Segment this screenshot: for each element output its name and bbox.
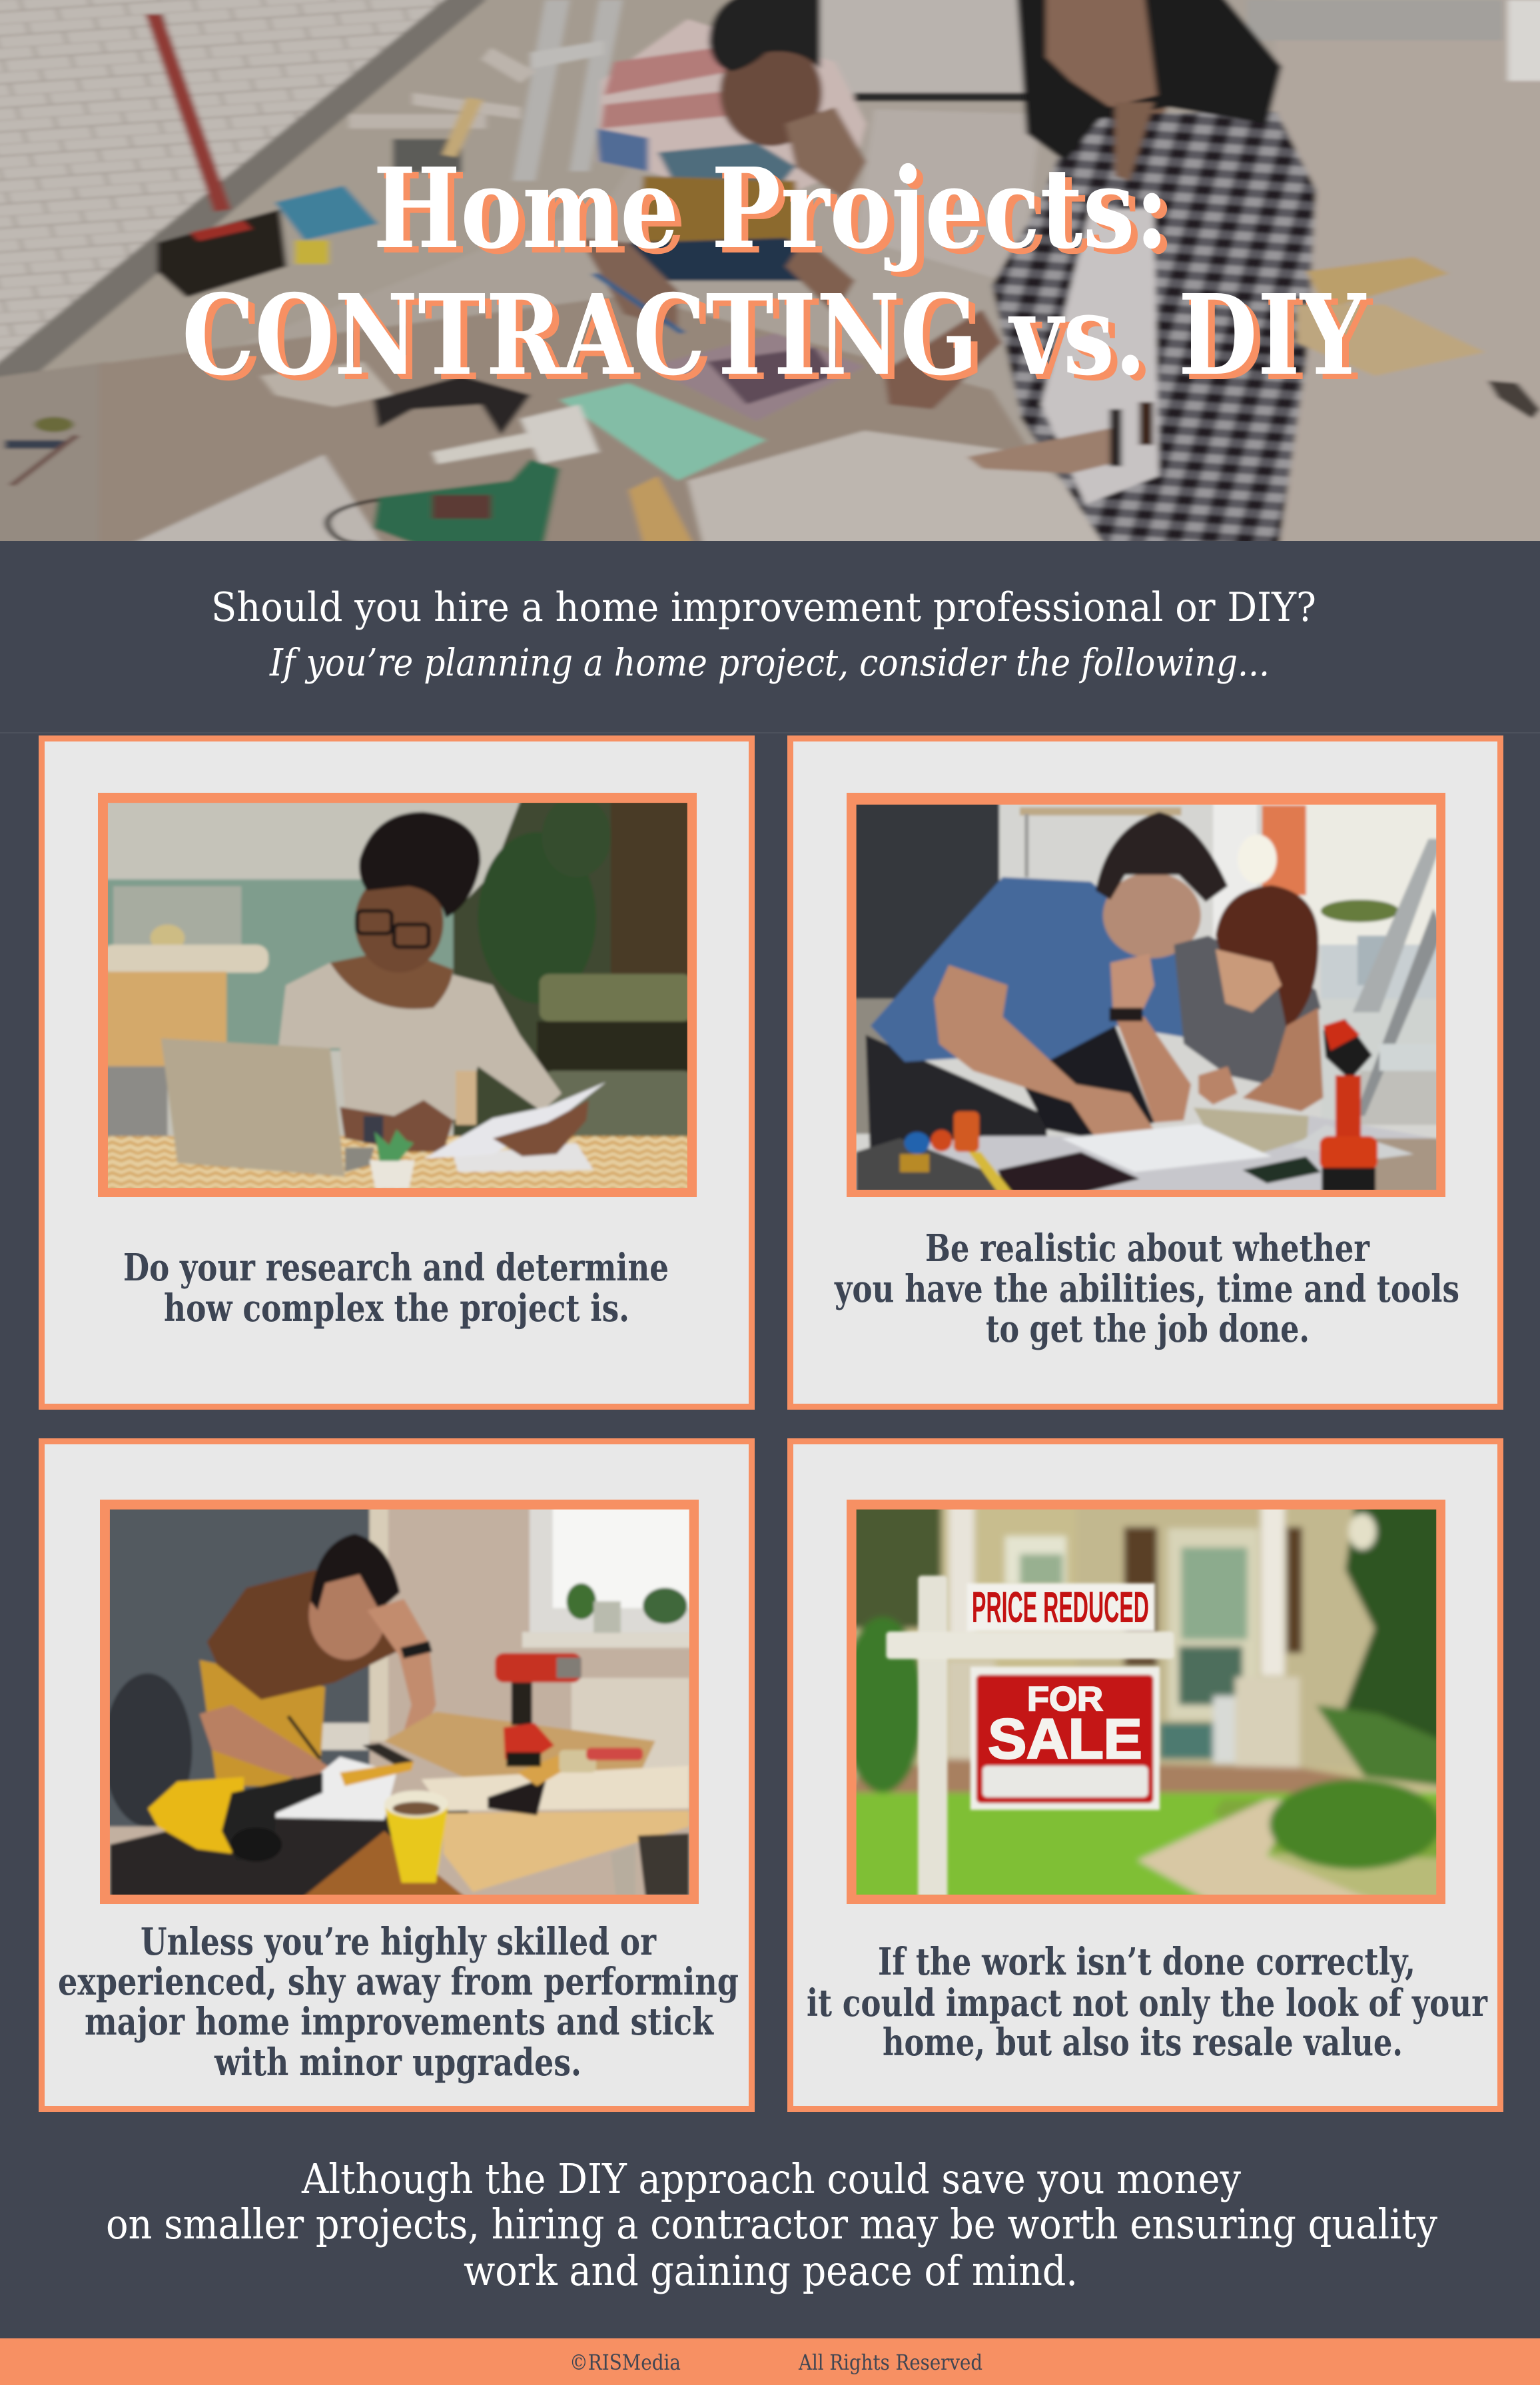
red drill bbox=[1324, 1019, 1372, 1080]
caption: with minor upgrades. bbox=[214, 2041, 581, 2085]
panel: be realistic bbox=[790, 738, 1500, 1407]
panel: do your research bbox=[41, 738, 751, 1407]
man bbox=[865, 1034, 1048, 1150]
photo: woman researching on laptop bbox=[99, 796, 699, 1197]
footer bar bbox=[0, 2338, 1540, 2385]
subtitle question: Should you hire a home improvement professional or DIY? bbox=[211, 584, 1316, 631]
caption bbox=[807, 1940, 1488, 2065]
yellow drill bbox=[148, 1777, 244, 1853]
panel: shy away from major improvements bbox=[41, 1442, 751, 2109]
subtitle italic lead-in: If you’re planning a home project, consider the following... bbox=[269, 642, 1270, 685]
table bbox=[384, 1711, 655, 1781]
copyright: ©RISMedia bbox=[570, 2350, 681, 2375]
photo frame bbox=[100, 1500, 699, 1904]
caption: Do your research and determine bbox=[123, 1246, 669, 1290]
photo frame bbox=[847, 793, 1445, 1197]
closing statement bbox=[106, 2154, 1437, 2295]
drill bbox=[370, 458, 562, 541]
caption bbox=[834, 1226, 1459, 1351]
closing statement: work and gaining peace of mind. bbox=[464, 2246, 1078, 2295]
caption: Be realistic about whether bbox=[925, 1226, 1370, 1270]
panel: resale value bbox=[790, 1442, 1500, 2109]
photo: couple reviewing plans bbox=[846, 796, 1448, 1197]
title bbox=[182, 144, 1367, 400]
woman bbox=[1147, 105, 1170, 116]
photo: man measuring at a workbench bbox=[99, 1502, 699, 1903]
caption: major home improvements and stick bbox=[85, 2000, 714, 2044]
caption: If the work isn’t done correctly, bbox=[878, 1940, 1415, 1984]
closing statement: Although the DIY approach could save you money bbox=[301, 2154, 1241, 2203]
caption: how complex the project is. bbox=[164, 1286, 629, 1330]
caption bbox=[58, 1920, 739, 2085]
caption: home, but also its resale value. bbox=[883, 2021, 1403, 2065]
woman bbox=[1174, 936, 1321, 1085]
boards bbox=[1306, 257, 1449, 309]
table bbox=[97, 297, 1027, 541]
caption: Unless you’re highly skilled or bbox=[141, 1920, 657, 1964]
photo frame bbox=[847, 1500, 1445, 1904]
sign text: SALE bbox=[988, 1707, 1142, 1770]
caption bbox=[123, 1246, 669, 1330]
ladder bbox=[513, 0, 570, 181]
sign text bbox=[972, 1582, 1149, 1770]
caption: to get the job done. bbox=[986, 1307, 1310, 1351]
caption: experienced, shy away from performing bbox=[58, 1960, 739, 2004]
sign text: FOR bbox=[1027, 1679, 1103, 1718]
desk bbox=[846, 1116, 1443, 1197]
photo: for sale sign in front of a house: PRICE REDUCED bbox=[972, 1582, 1149, 1632]
title: Home Projects: bbox=[373, 144, 1169, 274]
photo: for sale sign in front of a house bbox=[841, 1502, 1448, 1903]
man bbox=[597, 19, 867, 200]
photo frame bbox=[98, 793, 697, 1197]
man bbox=[200, 1660, 325, 1786]
cup bbox=[384, 1804, 448, 1883]
rights notice: All Rights Reserved bbox=[798, 2350, 982, 2375]
hero photo: couple planning a renovation bbox=[0, 0, 1540, 566]
red drill bbox=[495, 1653, 581, 1682]
level and toolbox bbox=[145, 14, 231, 212]
